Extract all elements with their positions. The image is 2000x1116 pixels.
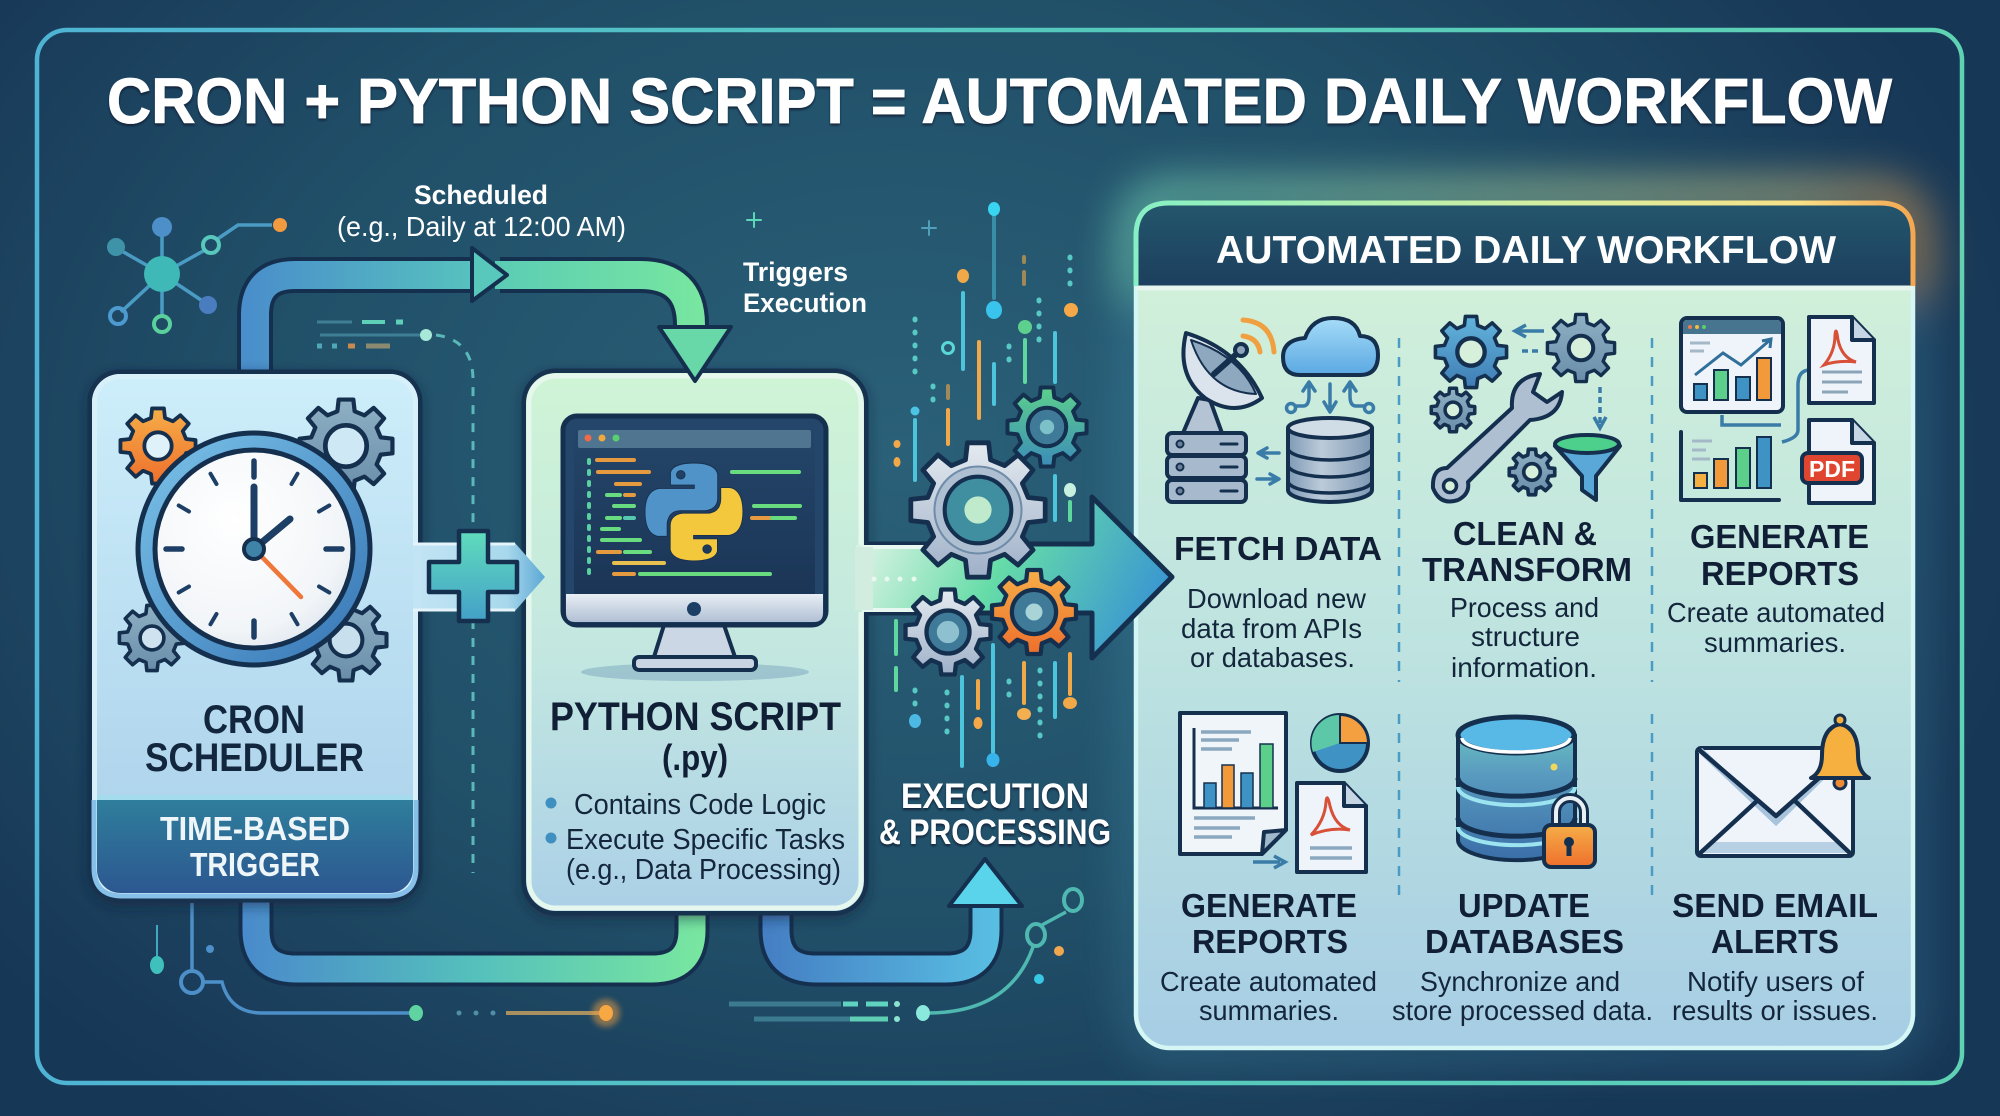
text: generate reports bottom: Create automated [1160, 966, 1377, 997]
arrow: lower return loop [256, 890, 692, 969]
text: clean and transform: TRANSFORM [1422, 551, 1632, 588]
arrow: execution output [856, 497, 1172, 658]
panel: python script [526, 373, 864, 911]
item: update databases [1392, 717, 1653, 1026]
time-based trigger band: TRIGGER [190, 846, 320, 883]
label: scheduled: (e.g., Daily at 12:00 AM) [337, 211, 626, 242]
text: generate reports bottom: REPORTS [1192, 923, 1348, 960]
connector highlights [855, 547, 1010, 610]
bullet list: Contains Code Logic [574, 789, 826, 821]
label: triggers execution [743, 257, 867, 318]
title: CRON + PYTHON SCRIPT = AUTOMATED DAILY WORKFLOW [107, 65, 1893, 137]
text: generate reports top: GENERATE [1690, 518, 1869, 555]
text: update databases: UPDATE [1458, 887, 1590, 924]
icon: report, pie chart, pdf [1180, 713, 1368, 872]
text: fetch data: FETCH DATA [1174, 530, 1382, 567]
text: generate reports top [1667, 518, 1885, 658]
icon: monitor with python logo [563, 416, 826, 681]
text: send email alerts: Notify users of [1687, 966, 1864, 997]
text: clean and transform: Process and [1450, 592, 1599, 623]
time-based trigger band [92, 795, 418, 899]
label: scheduled: Scheduled [414, 180, 548, 210]
text: update databases: Synchronize and [1420, 966, 1620, 997]
item: send email alerts [1672, 715, 1878, 1026]
text: send email alerts: SEND EMAIL [1672, 887, 1878, 924]
icon: processing gears [906, 387, 1087, 674]
label: triggers execution: Triggers [743, 257, 848, 287]
icon: charts and pdf documents: PDF [1809, 456, 1855, 482]
item: generate reports top [1667, 317, 1885, 658]
decorative circuit left [150, 903, 620, 1027]
arrow: processing return loop [776, 859, 1022, 969]
time-based trigger band: TIME-BASED [160, 810, 350, 847]
text: generate reports bottom [1160, 887, 1377, 1026]
text: generate reports top: REPORTS [1701, 555, 1859, 592]
decorative dashed path [317, 322, 473, 873]
text: fetch data: or databases. [1190, 642, 1355, 673]
item: generate reports bottom [1160, 713, 1377, 1026]
icon: plus sign [429, 531, 517, 621]
icon: wrench, gears, funnel [1431, 314, 1620, 502]
icon: python logo [645, 463, 743, 561]
bullet list [546, 789, 845, 886]
heading: cron scheduler [145, 698, 364, 780]
text: generate reports top: summaries. [1704, 627, 1846, 658]
text: generate reports bottom: GENERATE [1181, 887, 1357, 924]
icon: envelope with bell [1697, 715, 1869, 856]
heading: python script [550, 695, 841, 778]
label: execution and processing: & PROCESSING [879, 813, 1111, 852]
text: clean and transform: CLEAN & [1453, 515, 1597, 552]
text: clean and transform: structure [1471, 621, 1580, 652]
text: update databases: DATABASES [1425, 923, 1624, 960]
heading: python script: PYTHON SCRIPT [550, 695, 841, 739]
code lines [589, 460, 800, 574]
heading: python script: (.py) [662, 737, 728, 778]
arrow: scheduled (cron to python) [255, 248, 691, 395]
text: update databases: store processed data. [1392, 995, 1653, 1026]
text: generate reports top: Create automated [1667, 597, 1885, 628]
text: generate reports bottom: summaries. [1199, 995, 1339, 1026]
text: update databases [1392, 887, 1653, 1026]
icon: clock [138, 433, 370, 665]
panel header [1136, 203, 1913, 288]
text: send email alerts: ALERTS [1711, 923, 1839, 960]
text: clean and transform [1422, 515, 1632, 683]
decorative processing streams [747, 202, 1078, 767]
label: execution and processing [879, 777, 1111, 852]
connector: plus between cron and python [413, 531, 545, 621]
panel header: AUTOMATED DAILY WORKFLOW [1216, 229, 1836, 272]
text: fetch data: Download new [1187, 583, 1367, 614]
arrow head: triggers python script [659, 327, 731, 381]
bullet list: Execute Specific Tasks [566, 824, 845, 856]
icon: charts and pdf documents [1681, 317, 1874, 503]
text: send email alerts: results or issues. [1672, 995, 1878, 1026]
decorative circuit right [729, 889, 1082, 1022]
bullet list: (e.g., Data Processing) [566, 854, 841, 886]
label: execution and processing: EXECUTION [901, 777, 1089, 816]
panel: automated daily workflow [1134, 196, 1915, 1050]
item: fetch data [1167, 318, 1382, 673]
text: fetch data [1174, 530, 1382, 673]
icon: satellite, cloud, database [1167, 318, 1378, 502]
icon: database with lock [1458, 717, 1595, 867]
text: clean and transform: information. [1451, 652, 1597, 683]
heading: cron scheduler: CRON [203, 698, 305, 742]
panel: cron scheduler [92, 374, 418, 899]
label: triggers execution: Execution [743, 288, 867, 318]
text: fetch data: data from APIs [1181, 613, 1362, 644]
text: send email alerts [1672, 887, 1878, 1026]
label: scheduled [337, 180, 626, 242]
icon: gears behind clock [119, 400, 392, 681]
item: clean and transform [1422, 314, 1632, 683]
heading: cron scheduler: SCHEDULER [145, 736, 364, 780]
icon: network nodes [107, 217, 287, 332]
